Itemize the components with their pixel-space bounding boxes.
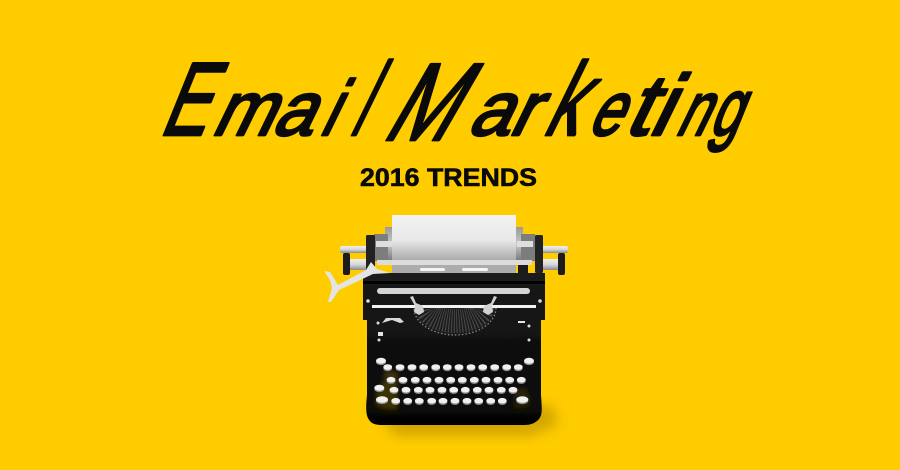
typewriter body xyxy=(363,273,545,425)
screws xyxy=(366,299,542,342)
title: ti xyxy=(613,58,703,154)
keyboard well glow right xyxy=(514,387,531,409)
keys xyxy=(374,358,534,404)
title: M xyxy=(366,41,503,164)
icon: typewriter xyxy=(324,215,568,436)
title: ma xyxy=(202,67,343,152)
title: e xyxy=(578,67,651,152)
carriage: side rollers and brackets xyxy=(343,227,565,275)
keyboard well glow xyxy=(375,370,398,410)
title xyxy=(149,41,767,164)
title: l xyxy=(337,41,406,158)
small badges xyxy=(382,318,404,323)
title: n xyxy=(666,67,737,152)
infographic canvas xyxy=(162,58,753,441)
white bar xyxy=(372,305,536,308)
silver scale strip xyxy=(377,288,530,294)
carriage return lever xyxy=(324,262,390,302)
type basket xyxy=(414,308,497,336)
basket clips xyxy=(410,296,497,315)
title: i xyxy=(310,65,366,152)
body dark band xyxy=(363,281,545,284)
paper bail bar xyxy=(377,260,532,265)
carriage: platen bar xyxy=(340,246,568,253)
title: ar xyxy=(458,67,565,152)
subtitle: 2016 TRENDS xyxy=(360,164,537,192)
ground shadow xyxy=(372,405,558,436)
title: g xyxy=(701,63,767,152)
title: E xyxy=(149,41,242,157)
paper sheet xyxy=(392,215,516,261)
key shadows xyxy=(374,359,534,405)
title: k xyxy=(530,41,621,158)
